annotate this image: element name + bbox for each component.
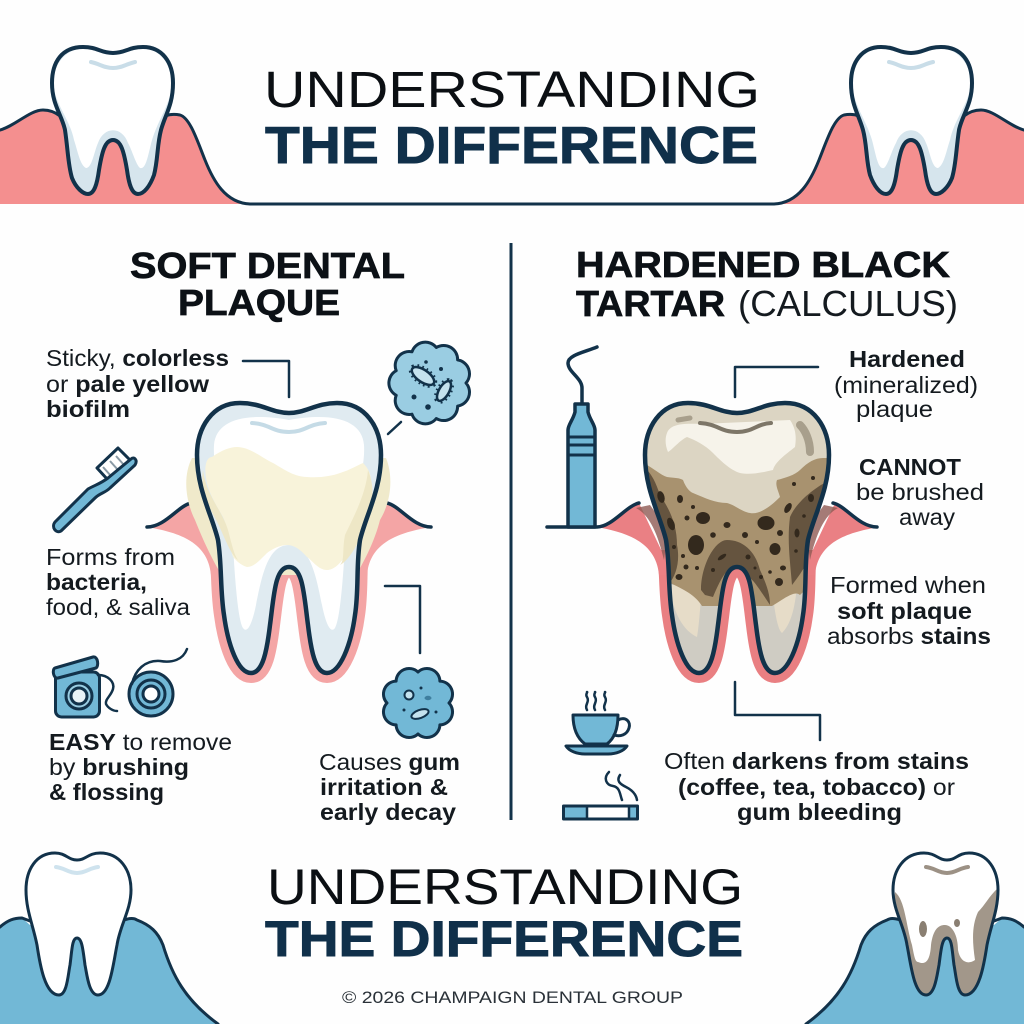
callout lines: tartar: [735, 367, 820, 740]
text: often darkens from stains: (coffee, tea, tobacco) or: [678, 774, 955, 800]
text: easy to remove: EASY to remove: [49, 729, 232, 755]
gum around soft plaque tooth: [145, 501, 433, 683]
heading: hardened black tartar: HARDENED BLACK: [576, 244, 950, 285]
text: sticky biofilm: or pale yellow: [46, 371, 209, 397]
center divider: [510, 243, 512, 820]
text: causes gum irritation: [319, 749, 460, 825]
text: cannot be brushed away: CANNOT: [859, 454, 961, 480]
text: cannot be brushed away: [856, 454, 984, 530]
text: formed when soft plaque absorbs stains: soft plaque: [837, 598, 972, 624]
tartar pits: [656, 476, 815, 586]
text: sticky biofilm: biofilm: [46, 396, 130, 422]
plaque shadow patches: [202, 470, 372, 565]
title: UNDERSTANDING: [264, 61, 760, 118]
callout lines: soft plaque: [243, 361, 420, 653]
text: forms from bacteria: bacteria,: [46, 569, 147, 595]
text: often darkens from stains: gum bleeding: [737, 799, 902, 825]
footer title: UNDERSTANDING: [267, 859, 743, 915]
text: cannot be brushed away: be brushed: [856, 479, 984, 505]
text: hardened mineralized plaque: Hardened: [849, 346, 965, 372]
header banner: left gum and tooth: [0, 47, 512, 204]
footer title: THE DIFFERENCE: [265, 911, 743, 967]
text: easy to remove: by brushing: [49, 754, 189, 780]
title: THE DIFFERENCE: [265, 117, 758, 175]
heading: hardened black tartar: (CALCULUS): [738, 283, 958, 324]
text: easy to remove: [49, 729, 232, 805]
text: causes gum irritation: irritation &: [320, 774, 448, 800]
text: often darkens from stains: [664, 748, 969, 825]
heading: soft dental plaque: SOFT DENTAL: [130, 245, 405, 286]
heading: soft dental plaque: PLAQUE: [178, 282, 340, 323]
icon: dental scaler instrument: [568, 347, 597, 527]
icon: coffee cup: [566, 692, 629, 754]
footer: left gum and clean tooth: [0, 853, 218, 1024]
text: hardened mineralized plaque: [834, 346, 978, 422]
icon: floss box: [53, 649, 187, 717]
text: causes gum irritation: Causes gum: [319, 749, 460, 775]
text: hardened mineralized plaque: plaque: [856, 396, 933, 422]
tooth enamel highlight: [214, 417, 364, 630]
text: easy to remove: & flossing: [49, 779, 164, 805]
heading: hardened black tartar: TARTAR: [576, 283, 725, 324]
icon: toothbrush: [54, 448, 136, 532]
tooth outline: [197, 403, 381, 673]
text: formed when soft plaque absorbs stains: [827, 572, 991, 649]
text: sticky biofilm: Sticky, colorless: [46, 345, 229, 371]
text: forms from bacteria: food, & saliva: [46, 594, 190, 620]
footer title: [265, 859, 743, 967]
tartar tooth outline: [645, 403, 829, 673]
header banner: right gum and tooth: [512, 47, 1024, 204]
footer: copyright: © 2026 CHAMPAIGN DENTAL GROUP: [342, 988, 683, 1007]
text: formed when soft plaque absorbs stains: Formed when: [830, 572, 986, 598]
title: [264, 61, 760, 175]
heading: hardened black tartar: [576, 244, 958, 324]
text: causes gum irritation: early decay: [320, 799, 456, 825]
text: cannot be brushed away: away: [899, 504, 956, 530]
text: often darkens from stains: Often darkens from stains: [664, 748, 969, 774]
text: formed when soft plaque absorbs stains: absorbs stains: [827, 623, 991, 649]
icon: bacteria cloud: [389, 342, 469, 424]
text: forms from bacteria: [46, 544, 190, 620]
stained groove: [700, 423, 771, 432]
tooth base colour: [645, 403, 829, 673]
text: hardened mineralized plaque: (mineralized): [834, 372, 978, 398]
tooth groove: [252, 423, 325, 432]
plaque halo behind tooth: [186, 458, 390, 575]
footer: right gum and stained tooth: [806, 853, 1024, 1024]
panel: tartar tooth: [547, 403, 879, 690]
heading: soft dental plaque: [130, 245, 405, 323]
icon: floss spool: [129, 649, 187, 716]
plaque layer on tooth: [205, 447, 371, 570]
icon: bacteria cloud lower: [383, 668, 453, 738]
text: sticky biofilm: [46, 345, 229, 422]
icon: cigarette: [564, 772, 638, 819]
text: forms from bacteria: Forms from: [46, 544, 175, 570]
tooth body: [197, 403, 381, 673]
panel: soft plaque tooth: [147, 403, 431, 673]
stains on tartar tooth: [648, 416, 827, 670]
gum around tartar tooth: [545, 501, 879, 683]
